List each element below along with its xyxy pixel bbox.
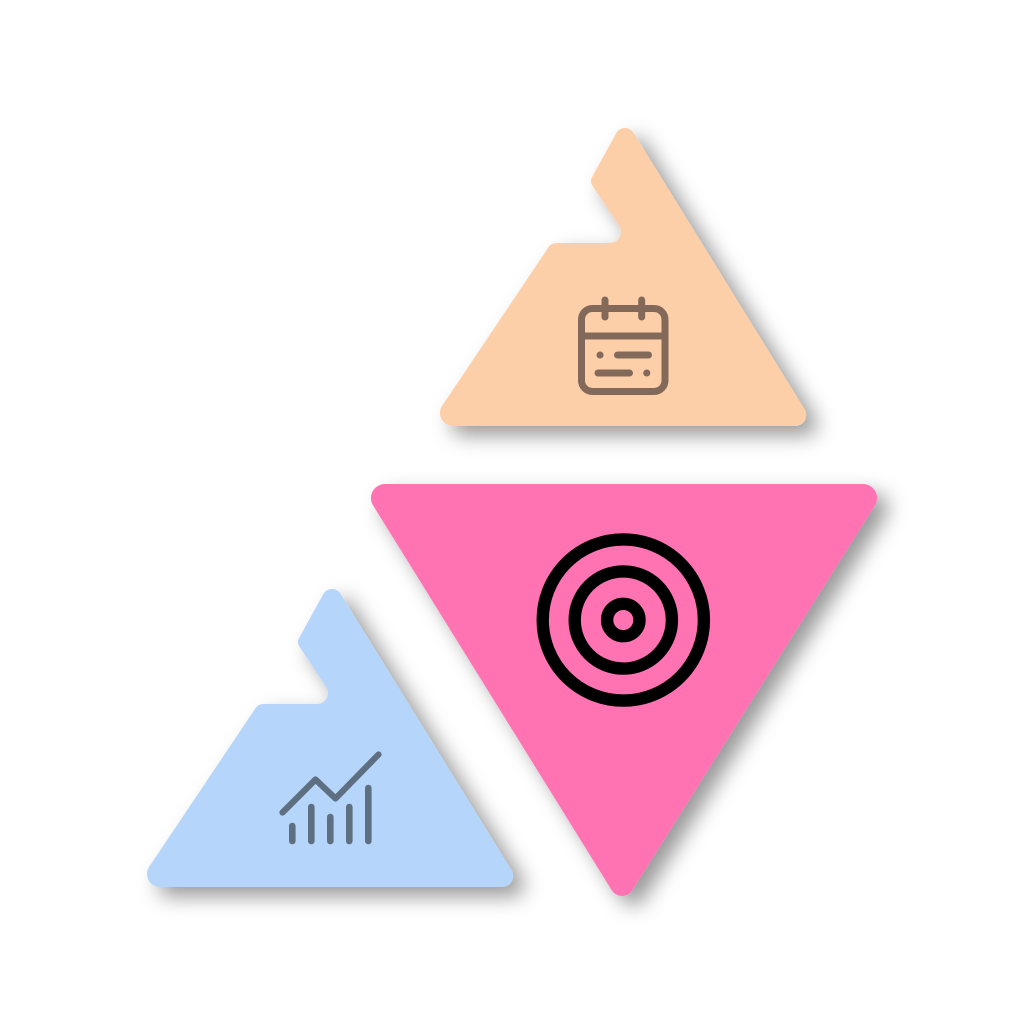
orange triangle shape: [440, 128, 806, 426]
icon: target: [543, 539, 704, 701]
icon: growth chart: [282, 754, 378, 841]
icon: calendar: [582, 300, 665, 392]
panel: orange notched triangle: [440, 128, 806, 426]
blue triangle shape: [147, 589, 513, 887]
panel: pink inverted triangle: [371, 484, 877, 896]
panel: blue notched triangle: [147, 589, 513, 887]
pink triangle shape: [371, 484, 877, 896]
